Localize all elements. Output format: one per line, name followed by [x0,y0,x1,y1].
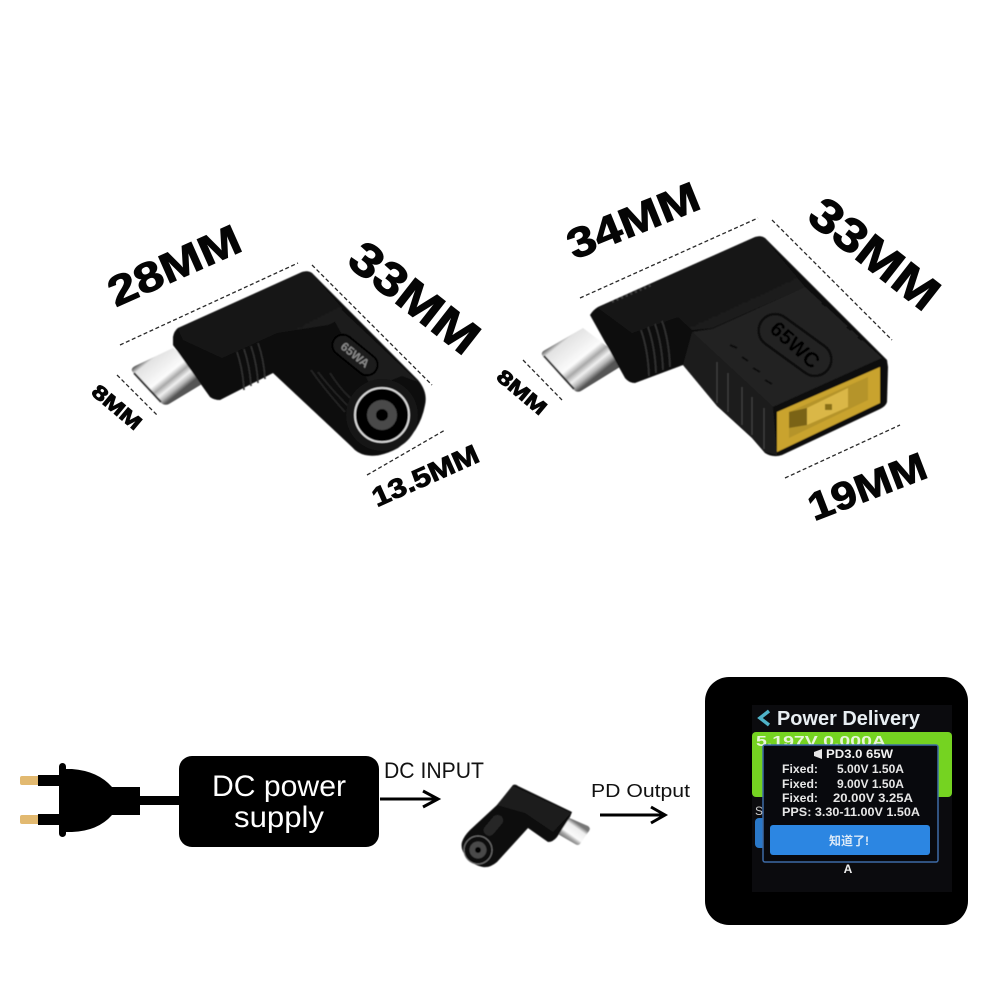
barrel ribs [311,370,355,412]
side ribs [717,362,764,449]
left adapter: round DC jack to USB-C [132,271,426,456]
background row: S [755,804,763,818]
side panel [683,332,777,455]
dimension label: 34MM: 34MM [560,173,706,268]
dimension label: 33MM right: 33MM [799,186,951,321]
ribbed neck [641,321,670,376]
badge [481,813,505,838]
dimension label: 13.5MM: 13.5MM [367,439,484,513]
dimension label: 28MM: 28MM [100,215,248,316]
DC power supply box: supply [234,801,324,834]
PD tester screen [705,677,968,925]
screen title: Power Delivery [777,707,921,730]
top face [598,237,805,333]
ribbed neck [237,343,265,390]
DC power supply box: DC power [212,770,346,803]
grip dashes [730,303,862,384]
icon: speaker [814,749,822,759]
label: DC INPUT: DC INPUT [384,758,484,783]
body [462,785,572,867]
matte face [692,287,882,407]
65WC badge: 65WC [765,317,824,373]
green status panel [752,732,952,797]
popup heading: PD3.0 65W [826,749,893,761]
PD profile lines [782,764,920,819]
dimension label: 8MM left: 8MM [87,381,146,435]
adapter body [173,271,426,456]
socket [464,836,492,864]
icon: mains plug [20,763,180,837]
PD profile lines: Fixed: [782,793,818,805]
PD profile lines: 20.00V 3.25A [833,793,913,805]
65WA badge [328,330,382,380]
PD profile lines: Fixed: [782,779,818,791]
dimension lines [117,218,900,478]
icon: back chevron [760,711,769,725]
yellow connector face [777,367,880,452]
DC power supply box [179,756,379,847]
PD tester screen: 知道了! [829,833,869,848]
button hint: A [844,862,853,876]
confirm button [770,825,930,855]
top face [497,786,571,832]
PD popup [763,745,938,862]
PD profile lines: Fixed: [782,764,818,776]
top edge notches [612,285,652,302]
right adapter: rectangular slim-tip jack to USB-C [542,236,888,456]
USB-C plug [132,348,212,405]
PD profile lines: PPS: 3.30-11.00V 1.50A [782,807,920,819]
USB-C plug [542,328,628,392]
dimension label: 33MM left: 33MM [339,230,491,365]
dimension label: 19MM: 19MM [802,445,933,530]
65WC badge [752,308,838,382]
USB-C plug [556,816,590,845]
arrow: DC input [380,791,438,807]
PD profile lines: 5.00V 1.50A [837,764,904,776]
centre tab [807,388,848,425]
dimension label: 8MM right: 8MM [492,366,551,420]
PD tester screen: 5.197V 0.000A [756,733,886,750]
connector cavity [789,377,868,438]
small adapter [462,785,590,867]
round DC socket [346,379,418,451]
arrow: PD output [600,807,665,823]
65WA badge: 65WA [338,339,372,371]
barrel sheen [335,310,418,388]
PD profile lines: 9.00V 1.50A [837,779,904,791]
top face [178,272,342,358]
label: PD Output: PD Output [591,780,690,801]
adapter body [590,236,888,456]
